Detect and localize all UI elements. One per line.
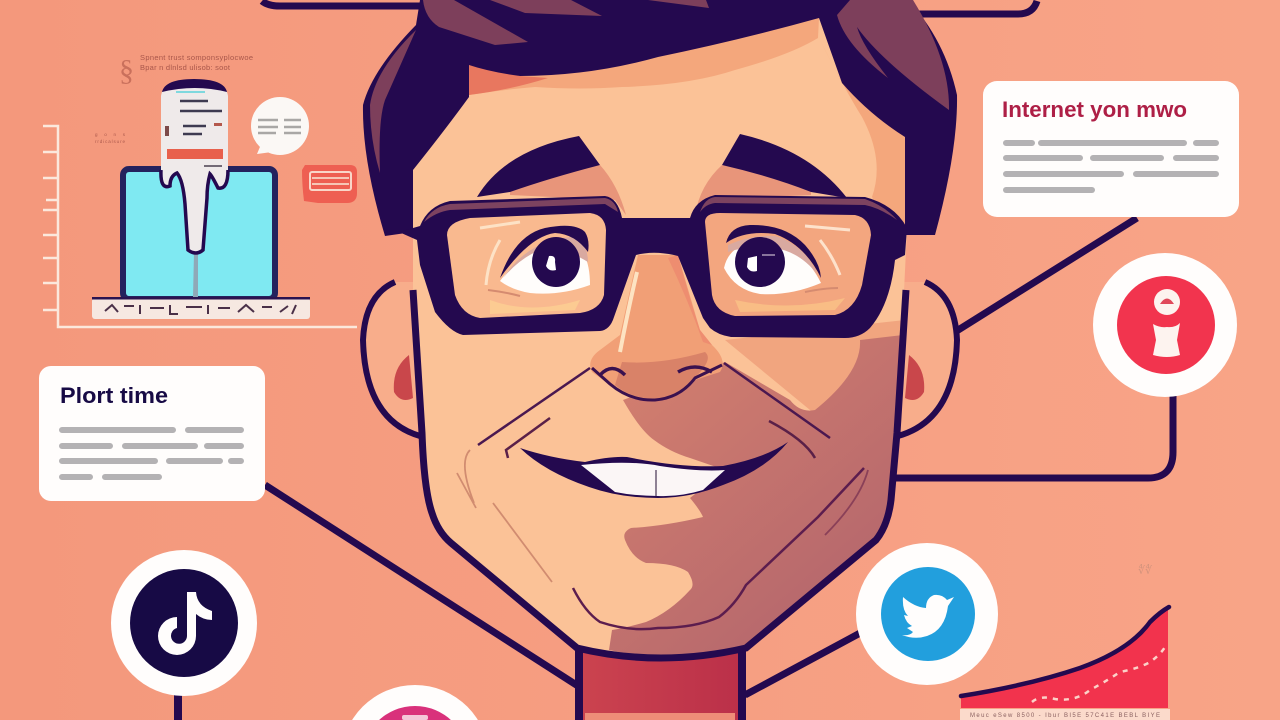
card heading: Plort time: [60, 383, 168, 408]
panel: laptop illustration: [43, 53, 357, 327]
chart: red growth curve: Meuc eSew 8500 - Ibur BI5E 57C41E BEBL BIYE: [970, 713, 1160, 719]
hair: [363, 0, 957, 236]
dotted series: [1032, 647, 1165, 702]
area: [961, 608, 1168, 708]
laptop screen: [123, 169, 275, 299]
left lens: [447, 213, 606, 318]
skin: [413, 18, 907, 658]
scribbled caption: Bpar n dlnlsd ulisob: soot: [140, 63, 231, 72]
scribbled caption: Spnent trust somponsyplocwoe: [140, 53, 253, 62]
right lens: [705, 213, 871, 316]
scribbled caption: §: [119, 54, 134, 87]
chin crease: [573, 468, 864, 629]
scribbled caption: rrdicalsure: [95, 139, 125, 144]
teeth: [581, 463, 725, 496]
face: [413, 18, 907, 658]
white speech bubble: [251, 97, 309, 155]
jaw outline: [413, 290, 906, 658]
cheek creases: [457, 450, 552, 582]
pupil: [735, 237, 785, 287]
chart axis labels: [960, 709, 1170, 720]
mouth: [506, 418, 815, 498]
connector lines: [178, 1, 1173, 720]
frame: [399, 195, 907, 338]
chart: red growth curve: [958, 564, 1172, 720]
left ear: [363, 282, 420, 436]
scribbled caption: [95, 53, 253, 144]
right eye: [724, 225, 838, 294]
smile lines: [478, 363, 830, 445]
chart axis: [43, 126, 357, 327]
nose: [590, 255, 723, 400]
scribbled caption: gons: [95, 132, 126, 137]
red speech bubble: [302, 165, 357, 203]
card heading: Internet yon mwo: [1002, 97, 1187, 122]
icon: TikTok badge: [111, 550, 257, 696]
pupil: [532, 237, 580, 287]
left eyebrow: [477, 136, 626, 215]
card text lines: [1006, 143, 1216, 190]
neck and collar: [579, 645, 742, 720]
glasses: [399, 195, 907, 338]
card: Plort time: [39, 366, 265, 501]
icon: red person badge: [1093, 253, 1237, 397]
right eyebrow: [695, 134, 847, 215]
right cheek tone: [725, 320, 905, 470]
icon: Instagram badge: [352, 685, 478, 720]
chin and cheek shadow: [609, 335, 903, 657]
laptop base: [92, 297, 310, 319]
trend line: [961, 607, 1169, 696]
hair highlights: [370, 0, 949, 173]
melting phone: [161, 79, 228, 297]
card text lines: [62, 430, 241, 477]
left eye: [488, 226, 590, 296]
chart note: ∜∜: [1138, 564, 1153, 577]
right ear: [898, 282, 957, 436]
card: Internet: [983, 81, 1239, 217]
icon: Twitter badge: [856, 543, 998, 685]
forehead shadow: [469, 18, 819, 95]
